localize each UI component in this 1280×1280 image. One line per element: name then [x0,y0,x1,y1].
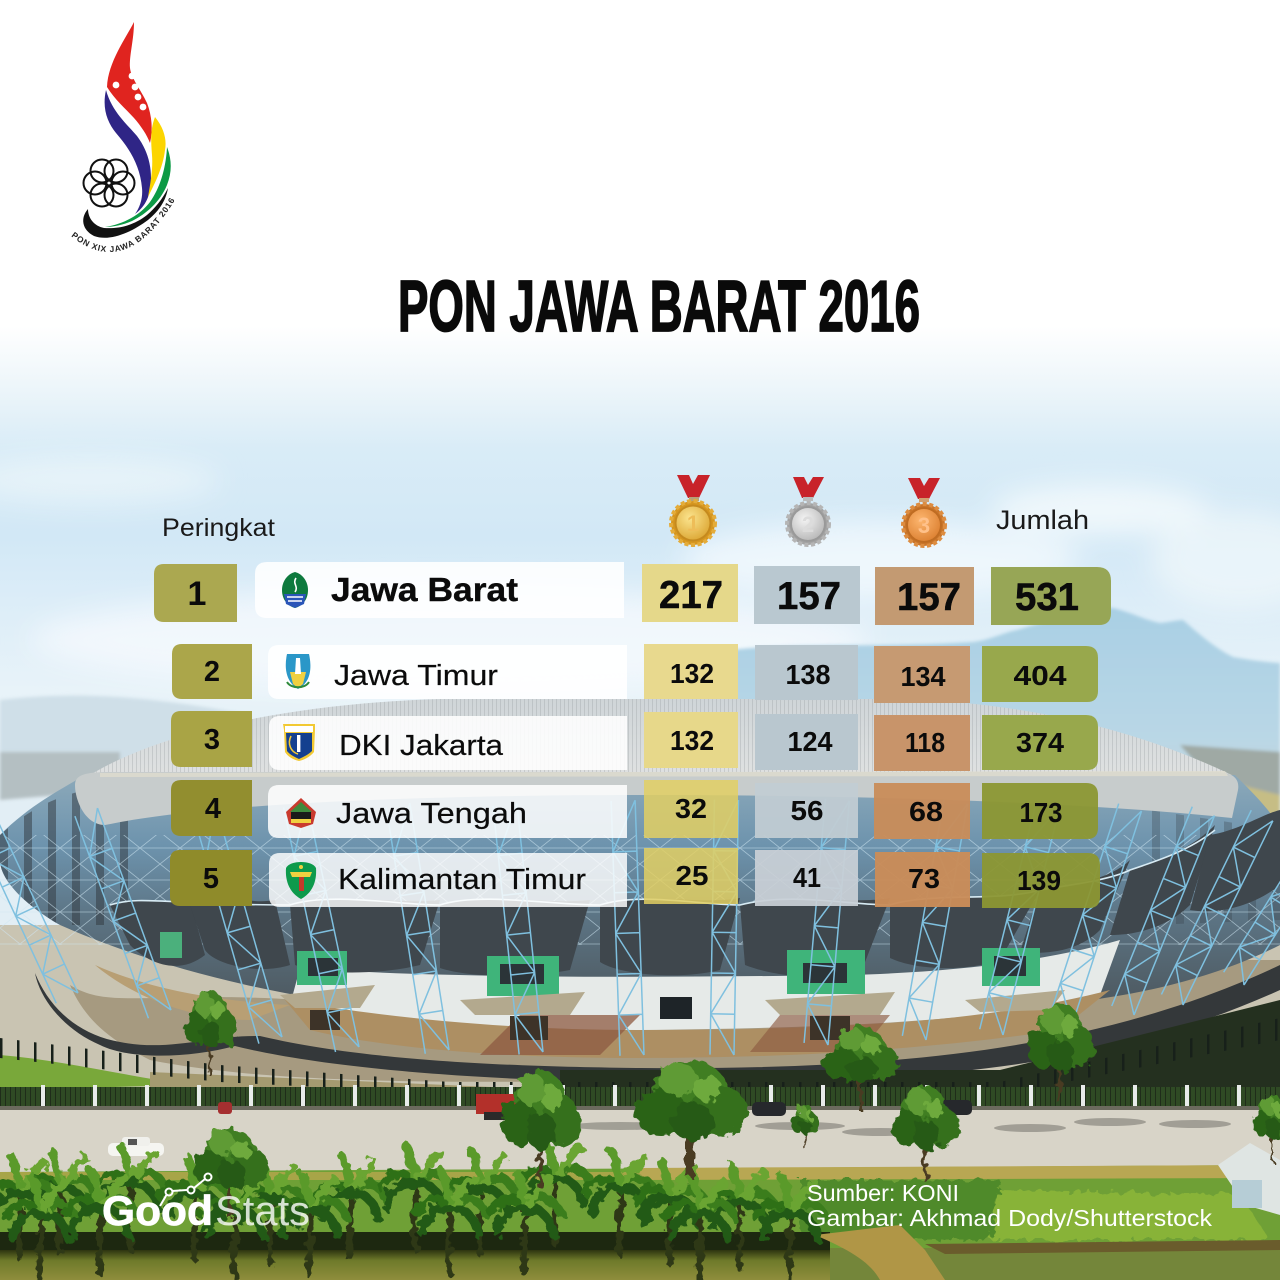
silver 41 [755,850,858,906]
gold 217 [642,564,738,622]
gold 132 [644,712,738,768]
row 3: DKI Jakarta [171,711,1098,771]
bronze 157: 157 [897,576,961,619]
bronze 134 [874,646,970,703]
dark scale panels [110,810,1280,978]
heading: Peringkat: Peringkat [162,514,275,542]
total 531 [991,567,1111,625]
white car [108,1143,164,1156]
logo flame blue [105,90,151,214]
entrance awnings [280,985,375,1008]
water and fields right [830,1248,1280,1280]
truck [476,1094,518,1114]
icon: East Kalimantan crest [286,862,316,899]
rank 5: 5 [203,863,219,895]
source credit: Sumber: KONI [807,1180,959,1206]
hut [1218,1143,1280,1215]
name panel [255,562,624,618]
gold 132: 132 [670,658,714,689]
logo caption [71,180,186,252]
chart line icon [160,1174,212,1206]
total 404 [982,646,1098,702]
bronze 68: 68 [909,796,943,827]
silver 56 [755,783,858,838]
silver 138: 138 [786,659,830,690]
gold 32 [644,780,738,838]
name panel [268,645,627,699]
silver 157 [754,566,860,624]
ground cream road [0,925,1280,1090]
name panel: Jawa Tengah [336,798,527,830]
logo: PON XIX Jawa Barat 2016 [72,22,174,252]
logo swoosh black [83,188,168,238]
silver 124: 124 [788,726,833,757]
title: PON JAWA BARAT 2016 [398,267,920,347]
total 404: 404 [1014,660,1067,691]
name panel: Jawa Barat [331,571,518,608]
background: road [0,1094,1280,1172]
logo: GoodStats: Stats [215,1187,310,1234]
gold 132: 132 [670,725,714,756]
bronze 68 [874,783,970,839]
rank 5 [170,850,252,906]
dirt path and bund [815,1225,945,1280]
logo white dots [113,73,146,110]
dark cars [752,1102,786,1116]
rank 2 [172,644,252,699]
rank 3 [171,711,252,767]
heading: Jumlah: Jumlah [996,505,1089,535]
name panel [268,785,627,838]
motorbike [218,1102,232,1114]
icon: DKI Jakarta crest [283,724,315,761]
silver 157: 157 [777,575,841,618]
silver 56: 56 [790,795,824,826]
total 139: 139 [1017,865,1061,896]
wave outlines [110,830,1215,905]
logo: GoodStats: Good [102,1187,213,1234]
background: fences and grass [0,1000,1280,1111]
icon: gold medal: 1 [687,511,699,536]
rank 1 [154,564,237,622]
gold 32: 32 [675,793,707,824]
source credit: Gambar: Akhmad Dody/Shutterstock [807,1205,1213,1231]
bronze 118: 118 [905,727,945,758]
dark curb [35,965,1280,1082]
rank 4 [171,780,252,836]
green boxes [297,951,347,985]
logo: PON XIX Jawa Barat 2016: PON XIX JAWA BARAT 2016 [72,198,174,252]
background: vegetation and water [0,991,1280,1280]
name panel: DKI Jakarta [339,730,504,762]
icon: West Java crest [282,572,308,608]
icon: East Java crest [286,654,310,689]
rank 1: 1 [188,575,206,613]
total 374: 374 [1016,727,1064,758]
name panel: Kalimantan Timur [338,864,586,896]
source credit [807,1180,1213,1231]
logo rings [84,160,134,206]
gold 217: 217 [659,574,723,617]
row 1: Jawa Barat [154,562,1111,625]
bronze 157 [875,567,974,625]
total 531: 531 [1015,576,1079,619]
gold 25: 25 [676,860,708,891]
icon: gold medal [671,475,715,545]
bronze 118 [874,715,970,771]
paving ring [70,960,1280,1082]
total 173 [982,783,1098,839]
row 5: Kalimantan Timur [170,848,1100,908]
icon: bronze medal [903,478,945,546]
rank 4: 4 [205,793,221,825]
rank 2: 2 [204,656,220,688]
silver 138 [755,645,858,700]
background: distant mountains [0,608,1280,825]
name panel [269,716,627,770]
icon: silver medal: 2 [802,512,814,537]
logo: GoodStats [102,1174,310,1234]
rank 3: 3 [204,724,220,756]
logo flame red [107,22,152,143]
bronze 134: 134 [900,661,946,692]
background: stadium [0,699,1280,1090]
silver 124 [755,714,858,770]
roof rim [75,772,1238,825]
icon: Central Java crest [286,798,316,828]
bronze 73 [875,852,970,907]
gold 132 [644,644,738,699]
row 2: Jawa Timur [172,644,1098,703]
stadium body [0,775,1280,1012]
bronze 73: 73 [908,863,940,894]
icon: bronze medal: 3 [918,513,930,538]
gold 25 [644,848,738,904]
row 4: Jawa Tengah [171,780,1098,839]
silver 41: 41 [793,862,821,893]
name panel [269,853,627,907]
total 374 [982,715,1098,770]
scaffolding trusses [0,799,1280,1056]
ground plaza [285,990,1110,1058]
logo flame green [105,147,171,227]
lower concourse band [290,940,1120,1030]
lattice across facade [0,835,1280,945]
stadium roof [82,699,1238,800]
name panel: Jawa Timur [334,660,498,692]
logo flame yellow [148,117,166,197]
total 173: 173 [1020,797,1062,828]
icon: silver medal [787,477,829,545]
total 139 [982,853,1100,908]
